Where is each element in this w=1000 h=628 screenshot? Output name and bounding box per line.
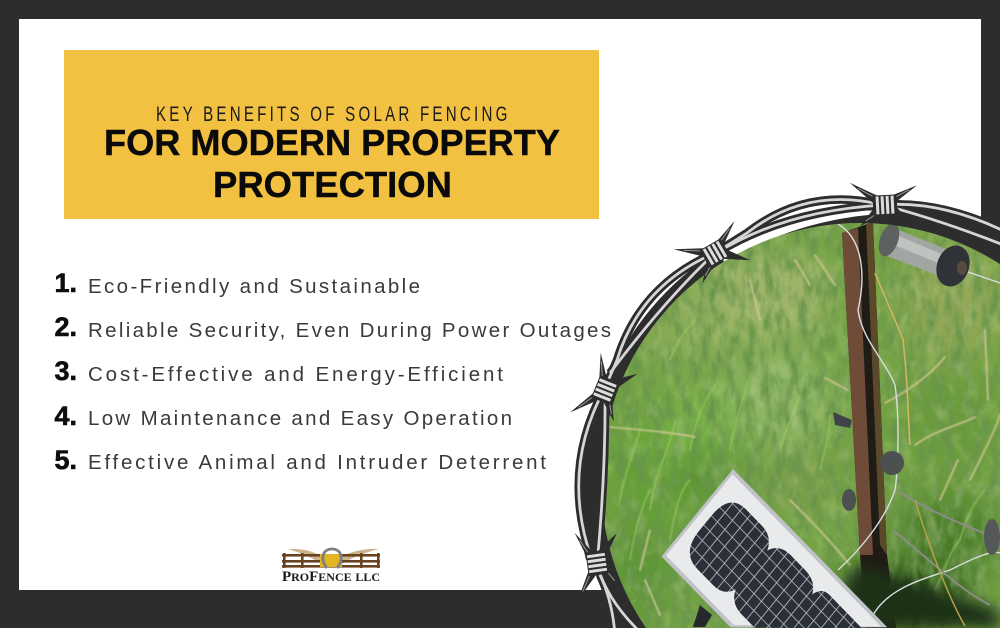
photo solar panel bbox=[661, 469, 887, 628]
logo horseshoe bbox=[323, 549, 341, 568]
barb top bbox=[850, 182, 917, 226]
strands light core bbox=[579, 200, 1000, 628]
barb left bbox=[570, 352, 638, 422]
panel face bbox=[666, 474, 881, 628]
banner background bbox=[64, 50, 599, 219]
photo base colour bbox=[590, 212, 1000, 628]
panel cells bbox=[690, 502, 862, 628]
heading line 1: FOR MODERN PROPERTY bbox=[104, 122, 560, 163]
wire ring dark band bbox=[582, 200, 981, 590]
item 5: Effective Animal and Intruder Deterrent bbox=[88, 451, 546, 474]
photo grass texture dark bbox=[590, 212, 1000, 628]
photo top insulator bbox=[878, 224, 970, 286]
photo grass texture light bbox=[590, 212, 1000, 628]
strands dark outline bbox=[574, 195, 981, 590]
photo fence post bbox=[842, 222, 896, 628]
item 3: 3. bbox=[54, 356, 77, 386]
logo horns bbox=[288, 549, 379, 565]
photo: grass field bbox=[590, 212, 1000, 628]
subtitle: KEY BENEFITS OF SOLAR FENCING bbox=[156, 101, 507, 126]
photo small insulators bbox=[833, 412, 1000, 555]
panel mount bbox=[693, 605, 712, 627]
photo dry grass stems bbox=[610, 255, 1000, 615]
panel frame bbox=[661, 469, 887, 628]
photo green blades bbox=[620, 320, 985, 590]
item 2: 2. bbox=[54, 312, 77, 342]
barbed wire circle with solar fence photo bbox=[569, 179, 1000, 628]
photo dark ground shadow bbox=[825, 565, 1000, 628]
item 3: Cost-Effective and Energy-Efficient bbox=[88, 363, 503, 386]
item 2: Reliable Security, Even During Power Outages bbox=[88, 319, 611, 342]
benefits list bbox=[54, 268, 611, 475]
logo wordmark: PROFENCE LLC bbox=[282, 569, 380, 585]
item 1: 1. bbox=[54, 268, 77, 298]
title banner bbox=[64, 50, 599, 219]
logo fence bbox=[282, 553, 380, 568]
photo wires bbox=[838, 224, 1000, 626]
item 1: Eco-Friendly and Sustainable bbox=[88, 275, 420, 298]
wire strands bbox=[579, 200, 1000, 628]
item 5: 5. bbox=[54, 445, 77, 475]
photo colour zones bbox=[605, 240, 1000, 628]
heading line 2: PROTECTION bbox=[213, 164, 452, 205]
ProFence logo bbox=[282, 549, 380, 585]
barb upper left bbox=[674, 221, 750, 284]
barb lower left bbox=[574, 533, 617, 592]
item 1 bbox=[54, 268, 420, 298]
item 4: 4. bbox=[54, 401, 77, 431]
item 4: Low Maintenance and Easy Operation bbox=[88, 407, 512, 430]
logo yellow plate bbox=[320, 554, 342, 567]
